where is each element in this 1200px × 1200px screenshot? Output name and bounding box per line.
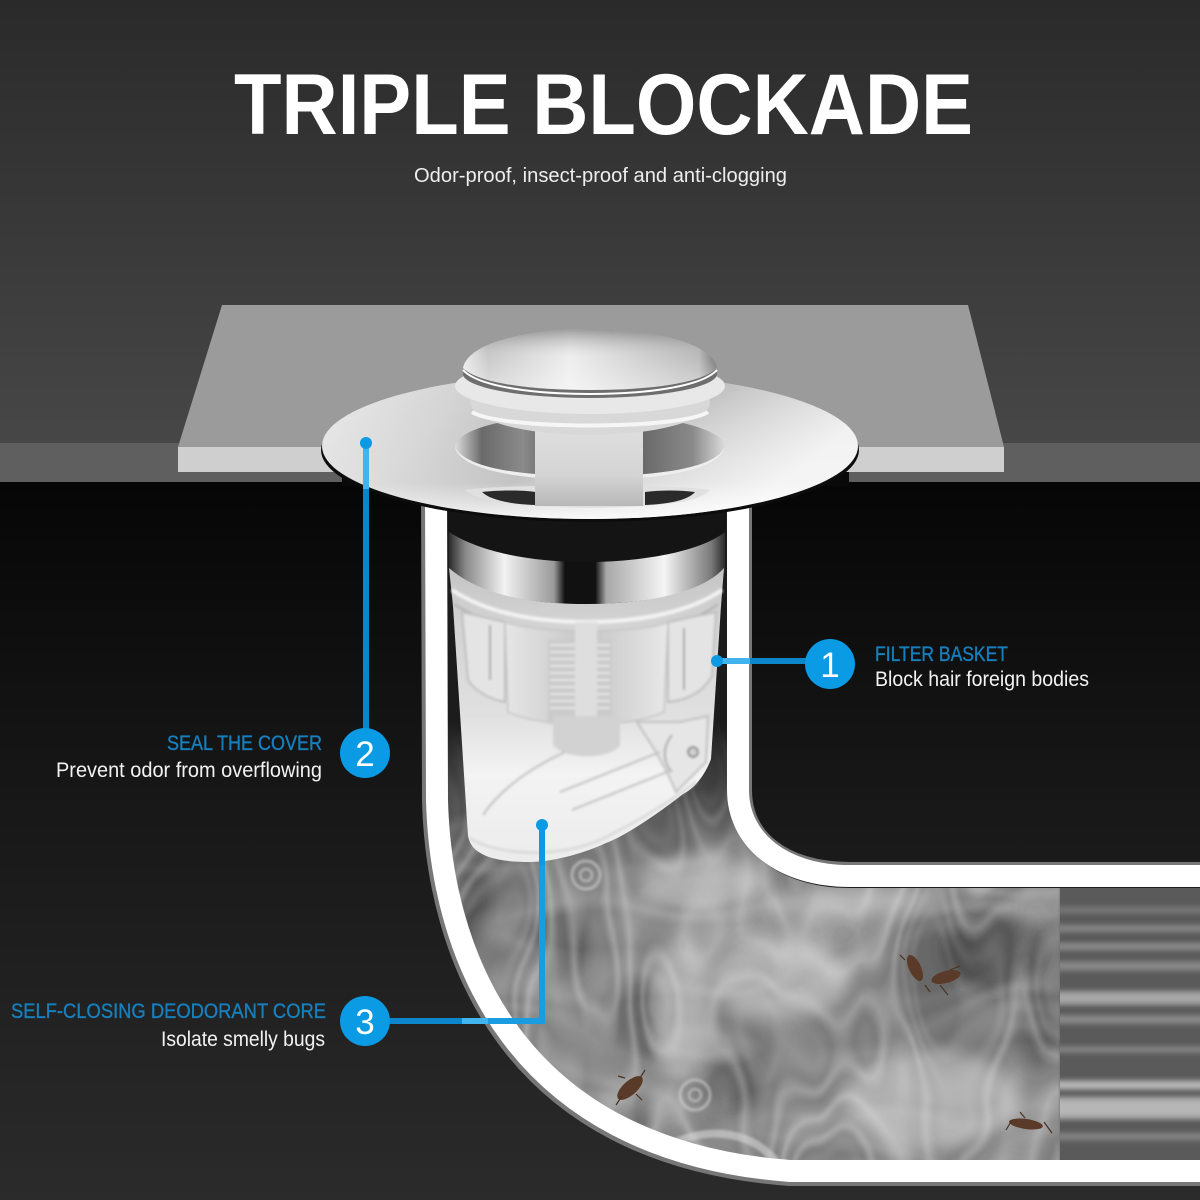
label 3 body: Isolate smelly bugs bbox=[161, 1028, 325, 1051]
label 1 heading: FILTER BASKET bbox=[875, 643, 1008, 666]
core plunger bbox=[553, 716, 620, 756]
callout 1: filter basket bbox=[711, 639, 1089, 691]
rubber gasket bbox=[448, 495, 726, 562]
flange rim shadow bbox=[321, 378, 859, 522]
badge 1 bbox=[805, 639, 855, 689]
basket interior detail bbox=[452, 590, 722, 853]
bugs bbox=[613, 953, 1052, 1133]
subtitle: Odor-proof, insect-proof and anti-clogging bbox=[414, 164, 787, 187]
badge 3: 3 bbox=[355, 1003, 375, 1042]
lower dark background bbox=[0, 482, 1200, 1200]
basket rim bbox=[452, 590, 722, 622]
ribbed core bbox=[505, 622, 668, 724]
dark smoke patches bbox=[448, 855, 1057, 1147]
bugs upper right bbox=[900, 953, 962, 995]
pipe walls bbox=[436, 490, 1200, 1171]
callout 3: self-closing deodorant core bbox=[11, 819, 548, 1051]
label 3 heading: SELF-CLOSING DEODORANT CORE bbox=[11, 1000, 326, 1023]
label 1 body: Block hair foreign bodies bbox=[875, 668, 1089, 691]
hinge flap bbox=[637, 716, 708, 792]
grey floor strip bbox=[0, 443, 1200, 482]
cap dome bbox=[463, 329, 717, 390]
label 2 body: Prevent odor from overflowing bbox=[56, 759, 322, 782]
basket base lines bbox=[483, 752, 672, 815]
stem bbox=[535, 430, 643, 506]
filter fins bbox=[462, 612, 716, 702]
cockroach lower left bbox=[613, 1070, 647, 1105]
callout 2: seal the cover bbox=[56, 437, 390, 782]
drain pipe with smoke bbox=[433, 490, 1200, 1174]
leader line 3 bbox=[385, 819, 548, 1024]
badge 2 bbox=[340, 728, 390, 778]
label 2 heading: SEAL THE COVER bbox=[167, 732, 322, 755]
badge 3 bbox=[340, 996, 390, 1046]
smoke swirls bbox=[572, 861, 775, 1160]
floor plate bbox=[178, 305, 1004, 486]
chrome flange bbox=[322, 373, 858, 519]
smoke texture bbox=[445, 700, 1060, 1165]
upper wall background bbox=[0, 0, 1200, 445]
cockroach lower right bbox=[1006, 1112, 1052, 1133]
badge 2: 2 bbox=[355, 735, 375, 774]
title: TRIPLE BLOCKADE bbox=[234, 57, 973, 153]
right side blurred streaks bbox=[1060, 880, 1200, 1170]
flange opening bbox=[455, 414, 725, 480]
drain filter product bbox=[321, 329, 859, 862]
chrome cap bbox=[463, 350, 717, 398]
soft light smoke masses bbox=[640, 854, 1015, 1150]
chrome band bbox=[449, 532, 725, 604]
leader line 2 bbox=[360, 437, 372, 734]
pipe wall shadow bbox=[433, 490, 1200, 1174]
leader line 1 bbox=[711, 655, 812, 667]
transparent filter basket bbox=[449, 568, 724, 862]
badge 1: 1 bbox=[820, 646, 840, 685]
pipe interior bbox=[440, 490, 1200, 1170]
flange slots bbox=[465, 486, 710, 508]
cap collar bbox=[470, 369, 710, 435]
